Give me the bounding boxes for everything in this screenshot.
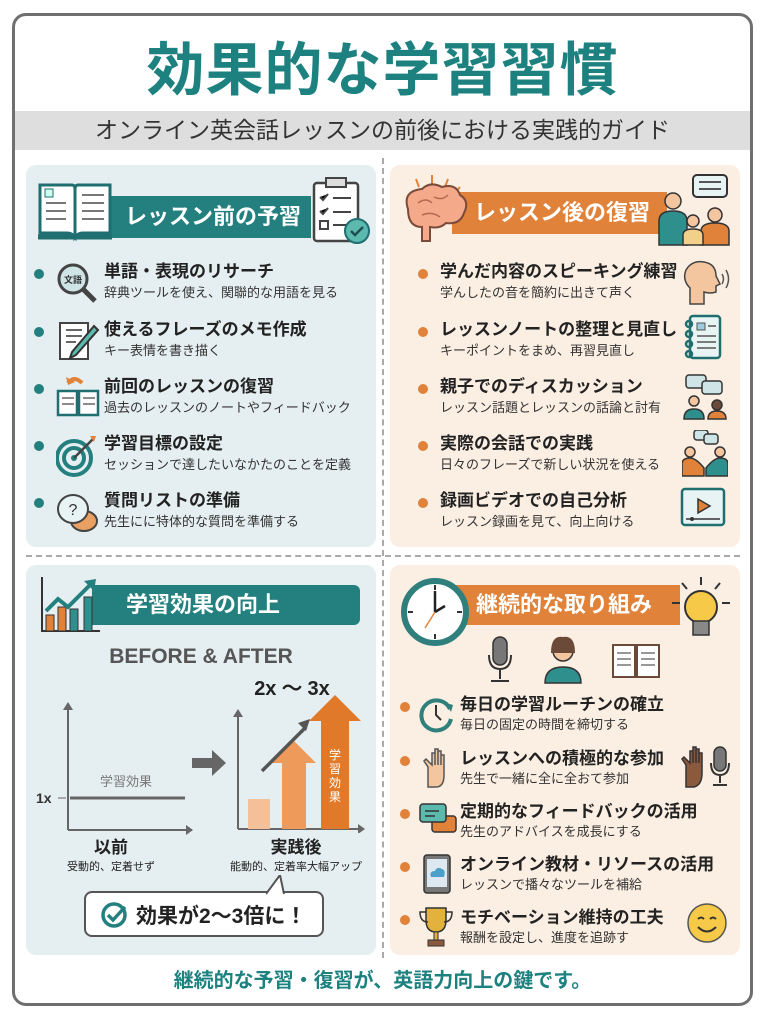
header: after lesson (452, 192, 667, 234)
item 1: 毎日の固定の時間を締切する (460, 717, 629, 732)
item 5 (400, 903, 727, 946)
item 1 (400, 695, 664, 732)
label: before (67, 838, 155, 873)
icon: open book (38, 184, 112, 242)
icon: light bulb (672, 577, 730, 636)
item 5: モチベーション維持の工夫 (460, 908, 664, 927)
subtitle band (15, 111, 750, 150)
icon: family with speech bubble (658, 174, 730, 246)
item 3: 過去のレッスンのノートやフィードバック (104, 400, 351, 415)
label: after: 実践後 (270, 838, 322, 857)
item 4 (400, 854, 714, 894)
chart: after: 習 (329, 760, 341, 777)
callout: 2-3x (84, 891, 324, 937)
item 3: レッスン話題とレッスンの話論と討有 (440, 400, 661, 415)
item 4: 学習目標の設定 (104, 434, 223, 453)
item 3 (418, 374, 727, 420)
item 4: 日々のフレーズで新しい状況を使える (440, 457, 660, 472)
item 1: 文語 (64, 274, 82, 285)
icon: brain (406, 175, 468, 242)
item 5 (418, 488, 726, 529)
item 1 (34, 262, 338, 303)
panel: continuous effort (390, 565, 740, 955)
panel: learning effect (26, 565, 376, 955)
header: before lesson: レッスン前の予習 (125, 204, 301, 229)
item 1: 毎日の学習ルーチンの確立 (460, 695, 664, 714)
icon row: mic, teacher, book (488, 636, 660, 684)
item 5: ? (69, 502, 78, 519)
label: after (230, 838, 362, 873)
header: after lesson: レッスン後の復習 (474, 200, 650, 225)
item 2: レッスンへの積極的な参加 (460, 749, 664, 768)
chart: after: 果 (329, 788, 341, 805)
item 4: セッションで達したいなかたのことを定義 (104, 457, 351, 472)
header: learning effect: 学習効果の向上 (126, 592, 280, 617)
item 5: 先生にに特体的な質問を準備する (104, 514, 299, 529)
item 2: 使えるフレーズのメモ作成 (104, 320, 307, 339)
chart: after: 学 (329, 746, 341, 763)
item 3: 親子でのディスカッション (440, 377, 643, 396)
item 5: レッスン録画を見て、向上向ける (440, 514, 634, 529)
item 5: 報酬を設定し、進度を追跡す (460, 930, 629, 945)
heading: before & after: BEFORE & AFTER (109, 645, 293, 668)
item 4: オンライン教材・リソースの活用 (460, 855, 714, 874)
item 4: 実際の会話での実践 (440, 434, 593, 453)
icon: growth chart (41, 577, 100, 632)
item 2: キーポイントをまめ、再習見直し (440, 343, 635, 358)
chart: before: 1x (36, 790, 52, 806)
item 1 (418, 260, 730, 305)
item 1: 学んしたの音を簡約に出きて声く (440, 285, 635, 300)
panel: before lesson (26, 165, 376, 547)
arrow: right (192, 750, 226, 776)
item 5 (34, 491, 299, 532)
item 3 (400, 802, 698, 839)
item 4 (34, 434, 351, 477)
header: before lesson (111, 196, 311, 238)
chart: before (36, 702, 193, 835)
label: before: 受動的、定着せず (67, 861, 155, 873)
callout: 2-3x: 効果が2〜3倍に！ (136, 905, 306, 928)
item 2: キー表情を書き描く (104, 343, 221, 358)
item 1: 学んだ内容のスピーキング練習 (440, 262, 678, 281)
header: continuous effort: 継続的な取り組み (476, 592, 652, 617)
header: learning effect (92, 585, 360, 625)
item 2 (34, 320, 307, 360)
title: 効果的な学習習慣 (146, 38, 618, 103)
item 5: 録画ビデオでの自己分析 (440, 491, 627, 510)
item 1: 辞典ツールを使え、関聯的な用語を見る (104, 285, 338, 300)
item 3: 定期的なフィードバックの活用 (460, 802, 698, 821)
item 4: レッスンで播々なツールを補給 (460, 877, 642, 892)
item 2: 先生で一緒に全に全おて参加 (460, 771, 629, 786)
icon: clipboard (312, 177, 370, 244)
item 1: 単語・表現のリサーチ (104, 262, 274, 281)
subtitle band: オンライン英会話レッスンの前後における実践的ガイド (95, 117, 670, 143)
item 2 (400, 746, 730, 788)
label: before: 以前 (94, 838, 128, 857)
header: continuous effort (450, 585, 680, 625)
item 4 (418, 430, 728, 477)
label: after: 能動的、定着率大幅アップ (230, 861, 362, 873)
chart: after (233, 678, 365, 833)
item 5: 質問リストの準備 (104, 491, 240, 510)
item 3: 前回のレッスンの復習 (104, 377, 274, 396)
item 2: レッスンノートの整理と見直し (440, 320, 677, 339)
chart: after: 効 (329, 774, 341, 791)
item 3 (34, 377, 351, 416)
footer message: 継続的な予習・復習が、英語力向上の鍵です。 (174, 970, 591, 992)
item 3: 先生のアドバイスを成長にする (460, 824, 642, 839)
item 2 (418, 314, 722, 360)
chart: after: 2x 〜 3x (254, 678, 330, 700)
icon: clock (401, 578, 469, 646)
panel: after lesson (390, 165, 740, 547)
chart: before: 学習効果 (100, 771, 152, 790)
